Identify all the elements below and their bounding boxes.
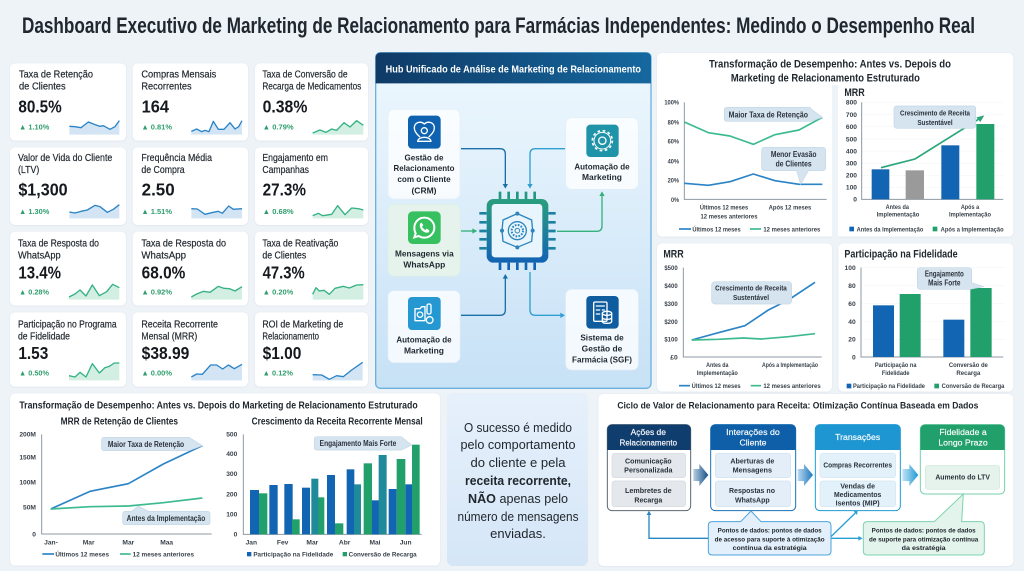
- KPI card: Valor de Vida do Cliente: (LTV): [18, 165, 39, 176]
- bar chart: MRR: Antes da Implementação: [857, 226, 923, 233]
- callout panel: success statement: do cliente e pela: [470, 455, 566, 470]
- stage: transactions: Compras Recorrentes: [823, 461, 892, 470]
- callout: stronger engagement: [314, 437, 412, 450]
- bar chart: recurring revenue growth: Participação na Fidelidade: [253, 551, 334, 558]
- bar chart: recurring revenue growth: Mar: [306, 539, 319, 546]
- KPI card: Taxa de Conversão de Recarga: [255, 63, 368, 141]
- line chart: retention: 100%: [664, 100, 679, 107]
- bar chart: loyalty participation: Fidelidade: [882, 370, 910, 377]
- KPI card: Taxa de Resposta do WhatsApp 13.4%: ▲ 0.28%: [19, 288, 49, 297]
- line chart: MRR: 12 meses anteriores: [763, 383, 821, 390]
- destination: pharmacy management system: Farmácia (SGF): [572, 354, 632, 364]
- KPI card: Participação no Programa de Fidelidade: [10, 312, 126, 387]
- bar chart: recurring revenue growth: 200: [226, 491, 238, 498]
- KPI card: Taxa de Resposta do WhatsApp 13.4%: 13.4%: [18, 262, 61, 282]
- arrow: actions to interactions: [693, 464, 708, 486]
- KPI card: Receita Recorrente Mensal: [133, 312, 248, 387]
- arrow: WhatsApp to hub: [461, 228, 477, 234]
- stage: long term loyalty: Longo Prazo: [938, 437, 988, 447]
- bar chart: MRR: 200: [846, 173, 857, 180]
- stage: transactions: [815, 425, 900, 511]
- KPI card: Participação no Programa de Fidelidade: de Fidelidade: [18, 331, 70, 342]
- KPI card: Receita Recorrente Mensal: Mensal (MRR): [141, 331, 197, 342]
- KPI card: Receita Recorrente Mensal: Receita Recorrente: [141, 320, 218, 331]
- KPI card: Valor de Vida do Cliente: $1,300: [18, 180, 68, 200]
- KPI card: Taxa de Retenção de Clientes: 80.5%: [18, 96, 62, 116]
- KPI card: Compras Mensais Recorrentes: [133, 63, 248, 141]
- panel: unified analytics hub: [376, 53, 651, 388]
- KPI card: Engajamento em Campanhas: 27.3%: [263, 180, 306, 200]
- line chart: retention: 20%: [668, 177, 679, 184]
- callout: stronger engagement: [917, 268, 983, 289]
- stage: customer interactions: Mensagens: [733, 465, 772, 474]
- line chart: retention: 12 meses anteriores: [763, 226, 821, 233]
- line chart: MRR retention: Mar: [122, 539, 135, 546]
- KPI card: Taxa de Resposta do WhatsApp 68.0%: Taxa de Resposta do: [141, 239, 226, 250]
- bar chart: loyalty participation: Participação na: [875, 362, 917, 369]
- panel: KPI cards rows 3-4: [10, 232, 368, 387]
- central processor chip: [479, 192, 556, 270]
- callout: higher retention: [102, 437, 202, 451]
- line chart: retention: 80%: [668, 119, 679, 126]
- KPI card: Taxa de Resposta do WhatsApp 68.0%: WhatsApp: [141, 250, 186, 261]
- stage: customer interactions: Aberturas de: [730, 456, 774, 465]
- callout: higher retention: [724, 107, 822, 121]
- callout: sustained growth: [712, 282, 792, 304]
- stage: relationship actions: Comunicação: [625, 456, 672, 465]
- KPI card: Taxa de Retenção de Clientes: de Clientes: [19, 81, 66, 92]
- line chart: MRR: $400: [664, 283, 678, 290]
- stage: customer interactions: [711, 425, 796, 511]
- KPI card: Engajamento em Campanhas: Engajamento em: [262, 153, 328, 164]
- bar chart: loyalty participation: 80: [848, 283, 856, 290]
- line chart: MRR: $200: [664, 319, 678, 326]
- line chart: MRR retention: 100M: [19, 479, 36, 486]
- KPI card: Taxa de Resposta do WhatsApp 13.4%: Taxa de Resposta do: [18, 239, 99, 250]
- bar chart: recurring revenue growth: Crescimento da Receita Recorrente Mensal: [252, 417, 423, 428]
- arrow: automation left to hub: [461, 274, 508, 315]
- connector arrows: [647, 511, 863, 541]
- destination: pharmacy management system: Sistema de: [580, 332, 624, 342]
- KPI card: Taxa de Conversão de Recarga: 0.38%: [263, 96, 307, 116]
- KPI card: Frequência Média de Compra: de Compra: [141, 165, 185, 176]
- bar chart: MRR: [844, 87, 1004, 233]
- line chart: MRR retention: 200M: [19, 432, 36, 439]
- callout: sustained revenue growth: [894, 106, 976, 128]
- bar chart: loyalty participation: Participação na Fidelidade: [853, 383, 925, 390]
- stage: relationship actions: Ações de: [631, 427, 666, 437]
- callout: sustained growth: Crescimento de Receita: [715, 284, 788, 293]
- line chart: MRR retention: Maa: [160, 539, 173, 546]
- bar chart: recurring revenue growth: Jun: [400, 539, 412, 546]
- KPI card: Participação no Programa de Fidelidade: 1.53: [18, 343, 48, 363]
- bar chart: loyalty participation: Participação na Fidelidade: [844, 248, 958, 260]
- callout: data points green: [863, 494, 984, 555]
- callout: data points blue: [708, 511, 831, 555]
- bar chart: MRR: 400: [846, 148, 857, 155]
- line chart: MRR: £0: [670, 354, 678, 361]
- bar chart: recurring revenue growth: Fev: [277, 539, 289, 546]
- stage: long term loyalty: [920, 425, 1005, 494]
- KPI card: Participação no Programa de Fidelidade: ▲ 0.50%: [19, 369, 49, 378]
- callout: data points blue: Pontos de dados: pontos de dados: [718, 528, 822, 535]
- cycle heading: Ciclo de Valor de Relacionamento para Receita: Otimização Contínua Baseada em Dados: [617, 401, 978, 411]
- KPI card: ROI de Marketing: ▲ 0.12%: [263, 369, 293, 378]
- line chart: retention: [664, 100, 827, 233]
- bar chart: loyalty participation: Conversão de: [949, 362, 988, 369]
- source: marketing automation left: [388, 291, 460, 363]
- callout panel: success statement: receita recorrente,: [465, 473, 571, 488]
- bar chart: recurring revenue growth: 100: [226, 511, 238, 518]
- bar chart: MRR: 800: [846, 100, 857, 107]
- line chart: retention: 0%: [671, 197, 679, 204]
- bar chart: MRR: Antes da: [886, 204, 909, 211]
- callout: data points blue: contínua da estratégia: [733, 545, 807, 552]
- destination: marketing automation right: [566, 118, 638, 189]
- panel heading: Transformação de Desempenho: Antes vs. Depois do: [709, 58, 951, 70]
- line chart: MRR: Implementação: [697, 370, 738, 377]
- bar chart: MRR: 100: [846, 185, 857, 192]
- callout: sustained revenue growth: Sustentável: [917, 118, 953, 127]
- line chart: MRR: $300: [664, 301, 678, 308]
- KPI card: Taxa de Retenção de Clientes: [10, 63, 126, 141]
- KPI card: Taxa de Reativação de Clientes: Taxa de Reativação: [262, 239, 338, 250]
- bar chart: MRR: Após a: [961, 204, 979, 211]
- bar chart: recurring revenue growth: 300: [226, 471, 238, 478]
- callout: higher retention: Maior Taxa de Retenção: [108, 440, 184, 449]
- bar chart: MRR: Após a Implementação: [941, 226, 1004, 233]
- stage: customer interactions: WhatsApp: [735, 495, 770, 504]
- stage: relationship actions: Relacionamento: [620, 437, 677, 447]
- bar chart: MRR: Implementação: [949, 212, 991, 219]
- arrow: CRM to hub: [461, 149, 508, 189]
- line chart: MRR retention: Últimos 12 meses: [55, 549, 109, 558]
- source: CRM: com o Cliente: [397, 174, 451, 184]
- bar chart: MRR: 700: [846, 112, 857, 119]
- KPI card: Compras Mensais Recorrentes: 164: [142, 96, 169, 116]
- panel: KPI cards rows 1-2: [10, 63, 368, 225]
- bar chart: MRR: Implementação: [877, 212, 919, 219]
- line chart: MRR retention: 0: [32, 531, 36, 538]
- stage: relationship actions: [607, 425, 691, 511]
- stage: long term loyalty: Fidelidade a: [939, 427, 987, 437]
- KPI card: Valor de Vida do Cliente: ▲ 1.30%: [19, 207, 50, 216]
- KPI card: Taxa de Reativação de Clientes: [255, 232, 368, 306]
- bar chart: loyalty participation: 20: [848, 337, 856, 344]
- KPI card: Taxa de Retenção de Clientes: ▲ 1.10%: [19, 123, 50, 132]
- callout: before implementation: Antes da Implementação: [127, 514, 205, 523]
- stage: transactions: Isentos (MIP): [836, 499, 880, 508]
- KPI card: ROI de Marketing: $1.00: [263, 343, 301, 363]
- KPI card: Engajamento em Campanhas: Campanhas: [262, 165, 309, 176]
- bar chart: recurring revenue growth: Conversão de Recarga: [349, 551, 417, 558]
- callout: before implementation: [123, 506, 210, 525]
- panel heading: Transformação de Desempenho: Antes vs. Depois do Marketing de Relacionamento Estruturado: [19, 401, 418, 412]
- bar chart: MRR: 600: [846, 124, 857, 131]
- KPI card: Taxa de Reativação de Clientes: 47.3%: [263, 262, 305, 282]
- panel: performance transformation top: [657, 53, 1013, 238]
- destination: marketing automation right: Automação de: [574, 161, 630, 171]
- bar chart: loyalty participation: [838, 243, 1013, 392]
- KPI card: Taxa de Conversão de Recarga: Taxa de Conversão de: [262, 69, 348, 80]
- line chart: MRR: [657, 243, 832, 392]
- callout panel: success statement: O sucesso é medido: [464, 420, 572, 435]
- bar chart: recurring revenue growth: 0: [234, 532, 238, 539]
- destination: marketing automation right: Marketing: [582, 172, 622, 182]
- hub header: [376, 53, 651, 83]
- stage: long term loyalty: Aumento do LTV: [935, 472, 990, 481]
- KPI card: Taxa de Retenção de Clientes: Taxa de Retenção: [19, 69, 93, 80]
- bar chart: MRR: 0: [853, 197, 857, 204]
- source: CRM: Gestão de: [404, 152, 444, 162]
- bar chart: loyalty participation: 100: [845, 265, 856, 272]
- panel: relationship value cycle: [598, 394, 1013, 566]
- bar chart: recurring revenue growth: 500: [226, 432, 238, 439]
- callout: data points blue: de acesso para suporte à otimização: [715, 536, 825, 543]
- source: CRM: (CRM): [411, 185, 437, 195]
- line chart: MRR retention: [19, 417, 212, 558]
- line chart: MRR: $500: [664, 265, 678, 272]
- callout panel: success statement: enviadas.: [490, 526, 546, 541]
- KPI card: Taxa de Resposta do WhatsApp 13.4%: [10, 232, 126, 306]
- callout panel: success statement: pelo comportamento: [460, 437, 576, 452]
- callout panel: success statement: número de mensagens: [458, 509, 579, 524]
- KPI card: Compras Mensais Recorrentes: Recorrentes: [141, 81, 192, 92]
- source: WhatsApp messages: [388, 204, 460, 276]
- line chart: MRR retention: 12 meses anteriores: [133, 551, 194, 558]
- KPI card: Taxa de Resposta do WhatsApp 68.0%: 68.0%: [142, 262, 185, 282]
- stage: transactions: Vendas de: [840, 481, 875, 490]
- line chart: MRR: Últimos 12 meses: [692, 381, 741, 390]
- bar chart: MRR: 300: [846, 161, 857, 168]
- callout panel: success statement: [447, 393, 588, 566]
- stage: transactions: Medicamentos: [834, 490, 881, 499]
- KPI card: Valor de Vida do Cliente: [10, 147, 126, 225]
- line chart: MRR: Após a Implementação: [762, 362, 818, 369]
- KPI card: Frequência Média de Compra: [133, 147, 248, 225]
- panel: lower right charts: [657, 243, 1013, 392]
- KPI card: Taxa de Resposta do WhatsApp 68.0%: [133, 232, 248, 306]
- panel heading: [709, 58, 951, 85]
- bar chart: loyalty participation: 0: [852, 354, 856, 361]
- line chart: retention: Após 12 meses: [769, 204, 812, 211]
- hub header: Hub Unificado de Análise de Marketing de Relacionamento: [386, 64, 641, 75]
- stage: relationship actions: Lembretes de: [625, 486, 672, 495]
- KPI card: Taxa de Reativação de Clientes: ▲ 0.20%: [263, 288, 294, 297]
- arrow: automation to hub: [527, 149, 565, 189]
- source: CRM: [388, 109, 460, 199]
- line chart: MRR retention: 150M: [19, 455, 36, 462]
- KPI card: Taxa de Resposta do WhatsApp 68.0%: ▲ 0.92%: [141, 288, 172, 297]
- KPI card: ROI de Marketing: ROI de Marketing de: [262, 320, 343, 331]
- callout: sustained growth: Sustentável: [733, 293, 769, 302]
- bar chart: recurring revenue growth: Jan: [246, 539, 257, 546]
- line chart: retention: 12 meses anteriores: [700, 213, 758, 220]
- line chart: retention: 40%: [668, 158, 679, 165]
- KPI card: Compras Mensais Recorrentes: Compras Mensais: [141, 69, 216, 80]
- stage: customer interactions: Interações do: [726, 427, 780, 437]
- source: CRM: Relacionamento: [393, 163, 454, 173]
- source: marketing automation left: Marketing: [404, 345, 444, 355]
- stage: customer interactions: Cliente: [739, 437, 767, 447]
- KPI card: Receita Recorrente Mensal: ▲ 0.00%: [141, 369, 172, 378]
- callout: higher retention: Maior Taxa de Retenção: [729, 111, 808, 120]
- KPI card: Taxa de Reativação de Clientes: de Clientes: [262, 250, 306, 261]
- source: WhatsApp messages: Mensagens via: [395, 249, 454, 259]
- bar chart: recurring revenue growth: Mai: [369, 539, 381, 546]
- callout: lower churn: [762, 147, 826, 184]
- KPI card: Compras Mensais Recorrentes: ▲ 0.81%: [141, 123, 172, 132]
- line chart: retention: Últimos 12 meses: [692, 224, 741, 233]
- bar chart: recurring revenue growth: [226, 417, 423, 558]
- KPI card: Receita Recorrente Mensal: $38.99: [142, 343, 189, 363]
- stage: customer interactions: Respostas no: [729, 486, 775, 495]
- destination: pharmacy management system: [566, 289, 638, 370]
- arrow: transactions to loyalty: [902, 464, 918, 486]
- KPI card: Frequência Média de Compra: 2.50: [142, 180, 175, 200]
- callout: data points green: da estratégia: [902, 545, 946, 552]
- line chart: MRR: MRR: [663, 248, 684, 260]
- stage: transactions: Transações: [835, 432, 881, 442]
- line chart: MRR retention: Jan-: [44, 539, 58, 546]
- callout: stronger engagement: Engajamento Mais Forte: [320, 439, 397, 448]
- arrow: hub to automation: [557, 191, 605, 231]
- callout: sustained revenue growth: Crescimento de Receita: [900, 109, 971, 118]
- line chart: MRR retention: 50M: [23, 505, 36, 512]
- panel heading: Marketing de Relacionamento Estruturado: [731, 73, 920, 85]
- callout: data points green: Pontos de dados: pontos de dados: [872, 528, 976, 535]
- bar chart: recurring revenue growth: Abr: [339, 539, 351, 546]
- bar chart: recurring revenue growth: 400: [226, 451, 238, 458]
- KPI card: Frequência Média de Compra: ▲ 1.51%: [141, 207, 172, 216]
- source: WhatsApp messages: WhatsApp: [403, 259, 445, 269]
- line chart: retention: Últimos 12 meses: [700, 202, 748, 211]
- KPI card: ROI de Marketing: Relacionamento: [262, 331, 319, 342]
- KPI card: Taxa de Conversão de Recarga: Recarga de Medicamentos: [262, 81, 361, 92]
- KPI card: ROI de Marketing: [255, 312, 368, 387]
- line chart: MRR retention: Mar: [83, 539, 95, 546]
- KPI card: Valor de Vida do Cliente: Valor de Vida do Cliente: [18, 153, 112, 164]
- arrow: hub to pharmacy system: [530, 272, 565, 318]
- line chart: retention: 60%: [668, 139, 679, 146]
- KPI card: Taxa de Resposta do WhatsApp 13.4%: WhatsApp: [18, 250, 61, 261]
- bar chart: loyalty participation: 40: [848, 319, 856, 326]
- line chart: MRR retention: MRR de Retenção de Clientes: [61, 417, 178, 428]
- source: marketing automation left: Automação de: [396, 334, 452, 344]
- bar chart: loyalty participation: Recarga: [956, 370, 981, 377]
- bar chart: loyalty participation: Conversão de Recarga: [942, 383, 1005, 390]
- panel: performance transformation bottom: [10, 393, 440, 566]
- KPI card: Taxa de Conversão de Recarga: ▲ 0.79%: [263, 123, 294, 132]
- callout panel: success statement: NÃO apenas pelo: [468, 491, 568, 506]
- bar chart: MRR: 500: [846, 136, 857, 143]
- callout: lower churn: Menor Evasão: [771, 150, 817, 159]
- callout: stronger engagement: Engajamento: [925, 269, 964, 278]
- callout: data points green: de suporte para otimização contínua: [869, 536, 979, 543]
- KPI card: Engajamento em Campanhas: ▲ 0.68%: [263, 207, 294, 216]
- stage: relationship actions: Personalizada: [624, 465, 673, 474]
- callout: lower churn: de Clientes: [776, 160, 812, 169]
- bar chart: MRR: MRR: [844, 87, 865, 99]
- destination: pharmacy management system: Gestão de: [582, 343, 623, 353]
- line chart: MRR: Antes da: [706, 362, 729, 369]
- bar chart: loyalty participation: 60: [848, 301, 856, 308]
- KPI card: Frequência Média de Compra: Frequência Média: [141, 153, 213, 164]
- arrow: interactions to transactions: [798, 464, 813, 486]
- KPI card: Participação no Programa de Fidelidade: Participação no Programa: [18, 320, 117, 331]
- stage: relationship actions: Recarga: [634, 495, 663, 504]
- line chart: MRR: $100: [664, 337, 678, 344]
- KPI card: Engajamento em Campanhas: [255, 147, 368, 225]
- callout: stronger engagement: Mais Forte: [928, 279, 961, 288]
